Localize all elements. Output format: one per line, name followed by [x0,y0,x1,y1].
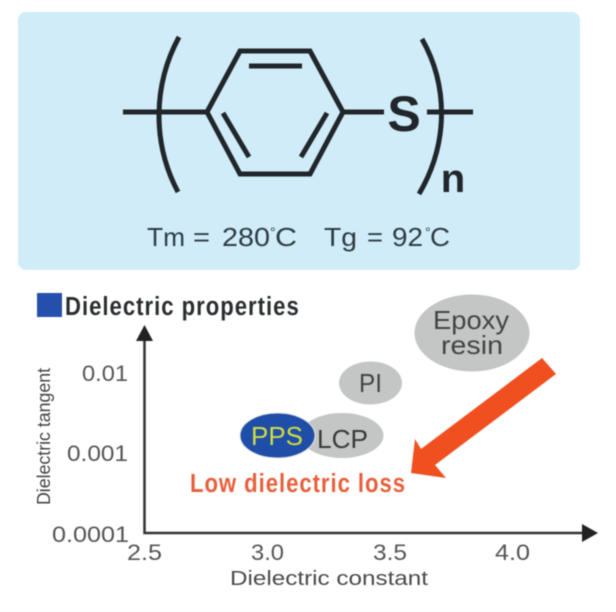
label: thermal properties: ° [270,224,276,240]
structure: polymer repeat unit [123,37,473,194]
x axis ticks: 3.0 [251,540,284,565]
label: thermal properties: = [193,222,210,252]
label: thermal properties [147,222,450,252]
label: thermal properties: = [367,222,383,252]
x axis ticks: 2.5 [127,540,162,565]
bubble: epoxy resin: resin [441,330,503,360]
y axis ticks: 0.0001 [52,522,129,547]
bubble: epoxy resin [414,294,530,372]
label: low dielectric loss: Low dielectric loss [190,469,405,498]
y axis ticks: 0.001 [67,441,128,466]
y axis ticks: 0.01 [82,361,128,386]
chart: dielectric tangent vs constant [34,294,598,590]
axes [136,325,598,542]
label: thermal properties: C [430,222,450,252]
bubble: PI [339,362,402,404]
label: thermal properties: Tm [147,222,185,252]
x axis ticks: 3.5 [373,540,407,565]
arrow: low dielectric loss [411,358,556,478]
bubble: PI: PI [359,368,382,398]
label: subscript n: n [441,157,465,201]
bubble: LCP: LCP [317,424,368,454]
bubble: epoxy resin: Epoxy [433,305,509,335]
y axis title: Dielectric tangent [34,368,54,505]
label: thermal properties: C [275,222,297,252]
bubble: PPS [240,413,315,458]
x axis ticks [127,540,530,565]
bubble: LCP [300,413,384,458]
panel: chemical structure [18,12,580,270]
label: thermal properties: ° [425,224,431,240]
x axis title: Dielectric constant [230,568,429,590]
label: thermal properties: Tg [324,222,357,252]
label: thermal properties: 280 [222,222,270,252]
label: thermal properties: 92 [392,222,423,252]
x axis ticks: 4.0 [495,540,530,565]
bubble: PPS: PPS [251,421,303,451]
heading: dielectric properties: Dielectric properties [65,292,299,321]
label: sulfur atom: S [387,86,421,142]
y axis ticks [52,361,129,547]
